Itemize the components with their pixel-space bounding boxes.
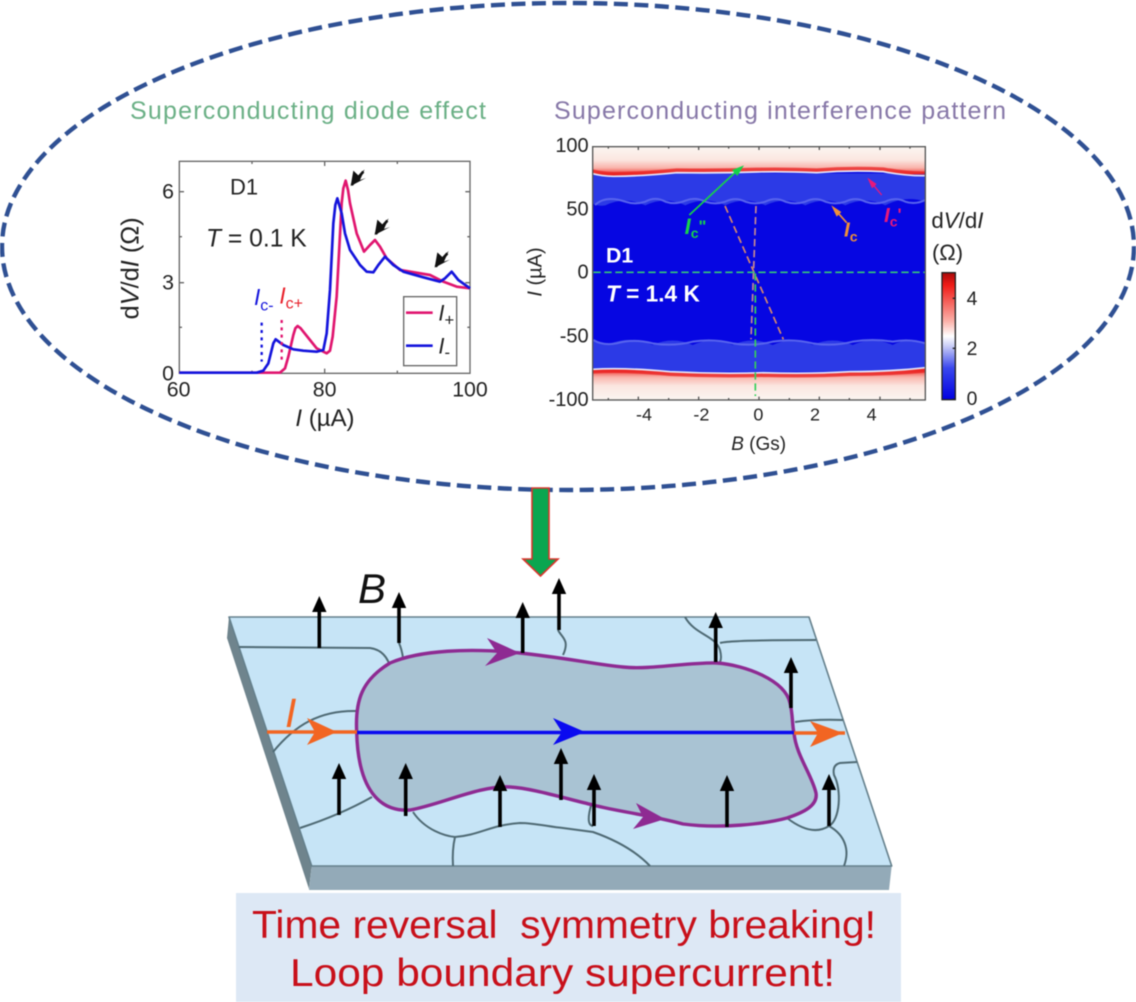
grain boundaries — [239, 617, 857, 866]
y tick labels: 50 — [566, 198, 589, 220]
tick labels: 60 — [167, 378, 191, 402]
chart annotations — [206, 175, 307, 253]
plate top — [229, 617, 892, 866]
plate left side — [227, 617, 312, 889]
y tick labels: -50 — [560, 325, 589, 347]
y tick labels: 0 — [578, 262, 589, 284]
annotation: Ic — [831, 205, 858, 244]
colorbar: (Ω) — [932, 240, 963, 265]
legend: I — [438, 301, 444, 326]
legend: - — [444, 343, 450, 362]
annotation: D1, T = 1.4 K: T = 1.4 K — [606, 280, 700, 306]
lower lighter blue band — [593, 340, 925, 372]
dashed guide lines — [593, 206, 925, 396]
curve: I+ — [179, 181, 470, 373]
axis title: I (µA): I (µA) — [524, 247, 546, 297]
tick labels — [162, 179, 488, 402]
tick labels: 6 — [162, 179, 174, 203]
top red band — [593, 147, 925, 176]
top red ridge — [593, 168, 925, 174]
supercurrent blue line — [357, 718, 794, 745]
x tick labels — [636, 405, 877, 425]
annotation: Ic': c — [890, 214, 898, 230]
bottom red band — [593, 368, 925, 400]
y tick labels — [549, 135, 589, 411]
critical current markers: c+ — [286, 296, 303, 313]
heatmap chart: interference pattern — [524, 135, 984, 455]
heatmap base — [593, 147, 925, 400]
heading: Superconducting interference pattern: Superconducting interference pattern — [554, 97, 1006, 125]
conclusion text box — [236, 893, 901, 1002]
heading: Superconducting diode effect: Superconducting diode effect — [130, 97, 486, 125]
upper lighter blue band — [593, 173, 925, 206]
annotation: Ic'' — [685, 165, 744, 241]
y tick labels: 100 — [555, 135, 589, 157]
colorbar: 0 — [967, 389, 977, 410]
chart annotations: T = 0.1 K — [206, 226, 307, 253]
bottom red ridge — [593, 371, 925, 376]
white critical-current lines — [593, 171, 925, 176]
magnetic field arrows — [312, 578, 836, 827]
axis title: B (Gs): B (Gs) — [731, 434, 786, 455]
x tick labels: 0 — [753, 405, 763, 425]
critical current markers: I — [254, 284, 260, 310]
annotation: Ic: I — [844, 219, 850, 242]
loop arrow top — [485, 638, 520, 666]
annotation: D1, T = 1.4 K: D1 — [606, 244, 633, 268]
axis title: dV/dI (Ω): dV/dI (Ω) — [117, 217, 145, 319]
colorbar: 4 — [967, 289, 978, 310]
loop arrow bottom — [633, 803, 665, 829]
annotation: Ic'': I — [685, 214, 691, 239]
x tick labels: 2 — [810, 405, 820, 425]
tick labels: 80 — [313, 378, 337, 402]
colorbar: dV/dI — [931, 208, 984, 233]
axis title: I (µA): I (µA) — [295, 405, 355, 432]
legend — [404, 297, 457, 366]
x tick labels: -4 — [636, 405, 652, 425]
superconducting loop region — [356, 650, 816, 826]
legend: I — [438, 333, 444, 358]
curve: I- — [179, 198, 470, 373]
line 1: Time reversal symmetry breaking! — [252, 904, 876, 947]
tick labels: 3 — [162, 270, 174, 294]
legend: + — [444, 310, 454, 329]
annotation: Ic' — [867, 178, 902, 230]
peak arrows — [351, 169, 450, 268]
annotation: Ic'': " — [699, 217, 706, 236]
lower band crest — [593, 340, 925, 345]
chart frame and ticks — [179, 161, 470, 373]
x tick labels: -2 — [693, 405, 709, 425]
critical current markers: I — [279, 282, 286, 308]
dashed ellipse callout — [2, 3, 1134, 490]
diagram: device plate with current loop — [227, 565, 892, 890]
critical current markers: c- — [260, 297, 274, 314]
y tick labels: -100 — [549, 389, 589, 411]
colorbar: 2 — [967, 339, 977, 360]
annotation: Ic: c — [850, 228, 858, 244]
critical current markers — [254, 282, 303, 362]
x tick labels: 4 — [867, 405, 877, 425]
current I orange line in — [267, 718, 357, 745]
annotation: Ic': ' — [898, 205, 902, 225]
annotation: D1, T = 1.4 K — [606, 244, 700, 306]
line chart: dV/dI versus I — [117, 161, 488, 432]
line 2: Loop boundary supercurrent! — [290, 952, 835, 995]
label: B: B — [358, 565, 386, 612]
annotation: Ic': I — [884, 204, 890, 227]
upper band crest — [595, 199, 925, 205]
plate front side — [309, 866, 892, 890]
annotation: Ic'': c — [691, 225, 699, 241]
chart annotations: D1 — [230, 175, 258, 200]
label: I: I — [285, 690, 296, 736]
tick labels: 0 — [162, 362, 174, 386]
current I orange line out — [794, 721, 845, 747]
green down arrow — [523, 488, 558, 576]
frame and ticks — [593, 147, 925, 400]
colorbar — [931, 208, 984, 410]
tick labels: 100 — [452, 378, 488, 402]
